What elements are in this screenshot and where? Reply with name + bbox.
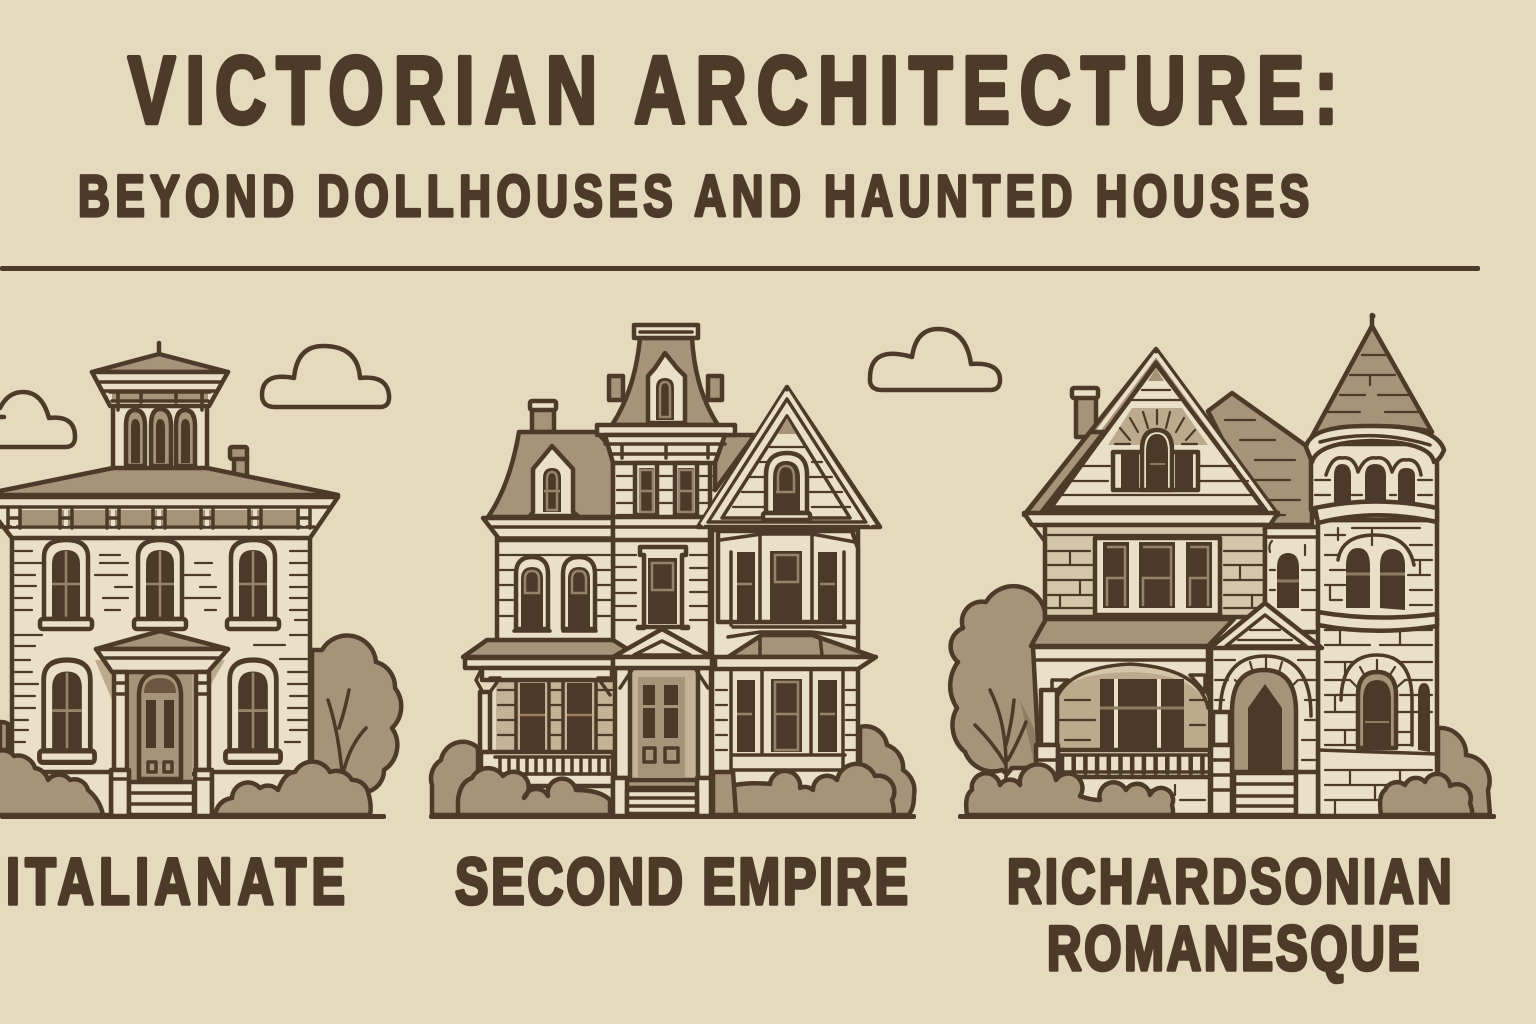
gable: [698, 387, 880, 527]
icon: cloud centre-right: [870, 329, 1000, 390]
left roof strip: [1026, 432, 1104, 514]
porch: [1033, 647, 1232, 815]
upper bay: [718, 531, 858, 638]
bay section wall: [712, 530, 858, 816]
centre wall window: [638, 547, 688, 628]
icon: left front bush: [458, 768, 610, 815]
central cornice: [613, 517, 710, 540]
icon: left bush: [0, 722, 103, 815]
subtitle: BEYOND DOLLHOUSES AND HAUNTED HOUSES: [78, 163, 1309, 228]
gable cornice: [1024, 513, 1312, 542]
icon: right bush: [732, 764, 894, 815]
illustration: Second Empire house: [429, 325, 916, 819]
title: VICTORIAN ARCHITECTURE:: [128, 37, 1338, 143]
left wall: [497, 538, 613, 643]
tower upper windows: [635, 463, 697, 515]
label: Richardsonian line 1: RICHARDSONIAN: [1007, 846, 1452, 917]
icon: cloud centre-left: [262, 346, 389, 407]
porch roof: [1031, 619, 1234, 646]
icon: tree: [312, 636, 401, 792]
ground line: [958, 814, 1496, 819]
upper windows: [40, 540, 92, 629]
porch interior: [476, 668, 614, 756]
label: Romanesque line 2: ROMANESQUE: [1047, 913, 1419, 984]
icon: left back bush: [431, 742, 478, 815]
lower windows: [39, 660, 95, 762]
divider: [0, 266, 1480, 271]
tower bands: [1315, 502, 1437, 631]
back roof: [1208, 393, 1312, 525]
left mansard roof: [488, 401, 613, 517]
cornice: [0, 497, 338, 538]
icon: cloud left: [0, 392, 75, 447]
icon: left bush: [966, 764, 1173, 815]
porch gable: [613, 629, 712, 668]
tower cornice: [597, 425, 735, 463]
porch roof: [463, 640, 640, 657]
icon: right bush: [1380, 774, 1472, 815]
illustration: Italianate house: [0, 343, 401, 819]
back roof: [715, 435, 755, 490]
wall: [12, 528, 310, 774]
main roof: [0, 468, 338, 495]
label: Italianate: ITALIANATE: [6, 845, 345, 919]
icon: right bush: [215, 762, 371, 815]
porch railing: [1058, 750, 1210, 815]
central mansard tower: [609, 325, 722, 425]
chimney: [1072, 388, 1098, 437]
central wall: [613, 435, 710, 815]
brick lines: [15, 539, 307, 742]
side bay: [1265, 527, 1320, 632]
siding lines: [500, 476, 712, 620]
illustration: Richardsonian Romanesque house: [950, 313, 1496, 819]
left wall windows: [516, 557, 548, 629]
left cornice: [483, 518, 613, 540]
ground line: [0, 814, 386, 819]
cupola: [92, 343, 228, 470]
icon: tree: [950, 586, 1045, 780]
main gable: [1024, 349, 1278, 515]
porch railing: [481, 752, 613, 786]
label: Second Empire: SECOND EMPIRE: [455, 845, 908, 919]
steps: [613, 778, 711, 816]
foundation: [36, 772, 290, 815]
portico: [95, 631, 228, 816]
round tower: [1311, 444, 1437, 816]
chimney: [230, 447, 247, 476]
icon: back bush: [1438, 728, 1490, 815]
stone front: [1211, 646, 1318, 816]
small gable: [1210, 603, 1322, 648]
steps: [1234, 772, 1318, 816]
icon: back bushes: [860, 726, 914, 815]
porch entry: [615, 668, 711, 788]
lower bay: [715, 657, 876, 775]
ground line: [429, 814, 916, 819]
upper wall: [1045, 525, 1265, 617]
spire: [1306, 313, 1444, 462]
bay roof: [728, 635, 875, 657]
